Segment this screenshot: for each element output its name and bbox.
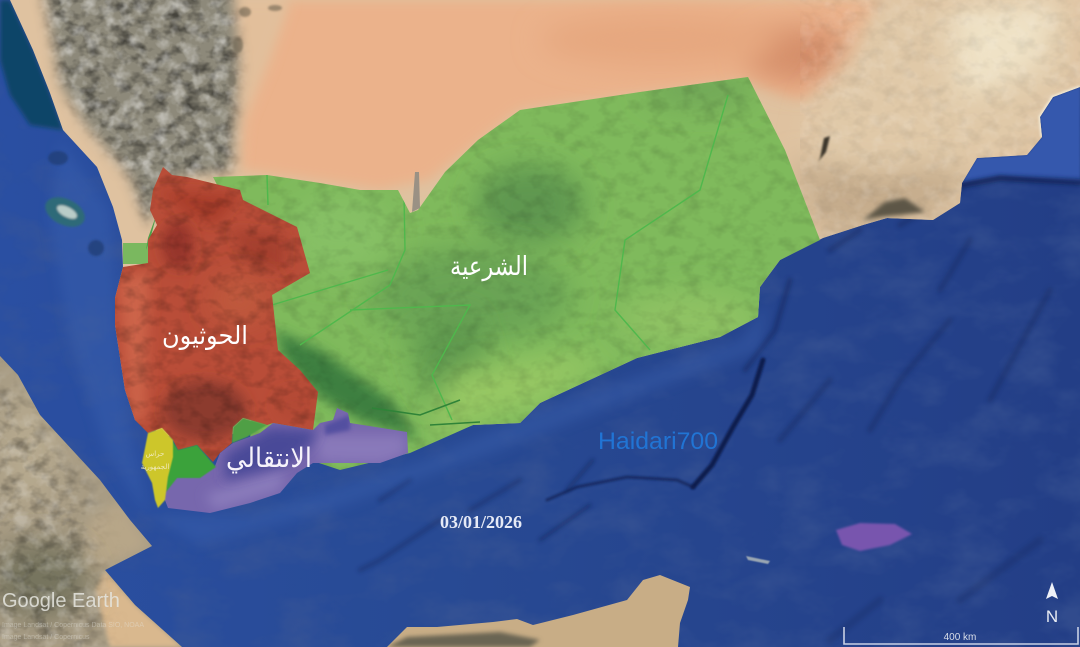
gray mountains	[36, 0, 248, 229]
label: Legitimate government: الشرعية	[450, 252, 528, 282]
Joint coast forces, green	[166, 440, 216, 492]
date: 03/01/2026	[440, 512, 522, 532]
dark teal sea corner	[0, 0, 63, 130]
Houthi territory	[110, 165, 325, 465]
sand	[232, 0, 880, 190]
label: Republican Guards: حراس	[146, 450, 164, 458]
north arrow	[1046, 582, 1058, 626]
Legitimate government territory	[123, 70, 840, 480]
coastal shelf	[50, 140, 770, 545]
coastal basin	[863, 198, 925, 220]
tan border band	[238, 28, 278, 134]
Google Earth logo: Image Landsat / Copernicus	[2, 634, 90, 641]
label: Transitional Council: الانتقالي	[226, 443, 312, 474]
Google Earth logo	[2, 590, 144, 641]
Republican Guards territory	[141, 428, 173, 508]
southeast mountains	[805, 0, 1080, 235]
green strip north of STC	[232, 418, 267, 443]
scale bar: 400 km	[944, 632, 976, 643]
small islands	[746, 556, 770, 564]
label: Houthis: الحوثيون	[162, 321, 248, 350]
deep gulf ridges	[360, 178, 1080, 640]
western strip	[146, 213, 157, 250]
Republican Guards territory: الجمهورية	[141, 463, 169, 471]
Southern Transitional Council territory	[164, 408, 408, 513]
north arrow: N	[1046, 607, 1058, 626]
Marib gap	[412, 172, 420, 212]
Google Earth logo: Google Earth	[2, 590, 120, 612]
watermark: Haidari700: Haidari700	[598, 428, 718, 455]
Socotra	[836, 523, 912, 551]
Red Sea islands	[40, 151, 104, 256]
scale bar	[844, 627, 1078, 644]
Google Earth logo: Image Landsat / Copernicus Data SIO, NOAA	[2, 622, 144, 629]
dark outcrops on tan band	[228, 5, 282, 87]
land: Arabia	[10, 0, 1080, 436]
Midi coastal patch	[123, 243, 149, 264]
land: Horn of Africa	[0, 350, 190, 647]
land: Somalia coast	[387, 575, 690, 647]
eastern shelf	[962, 87, 1080, 183]
